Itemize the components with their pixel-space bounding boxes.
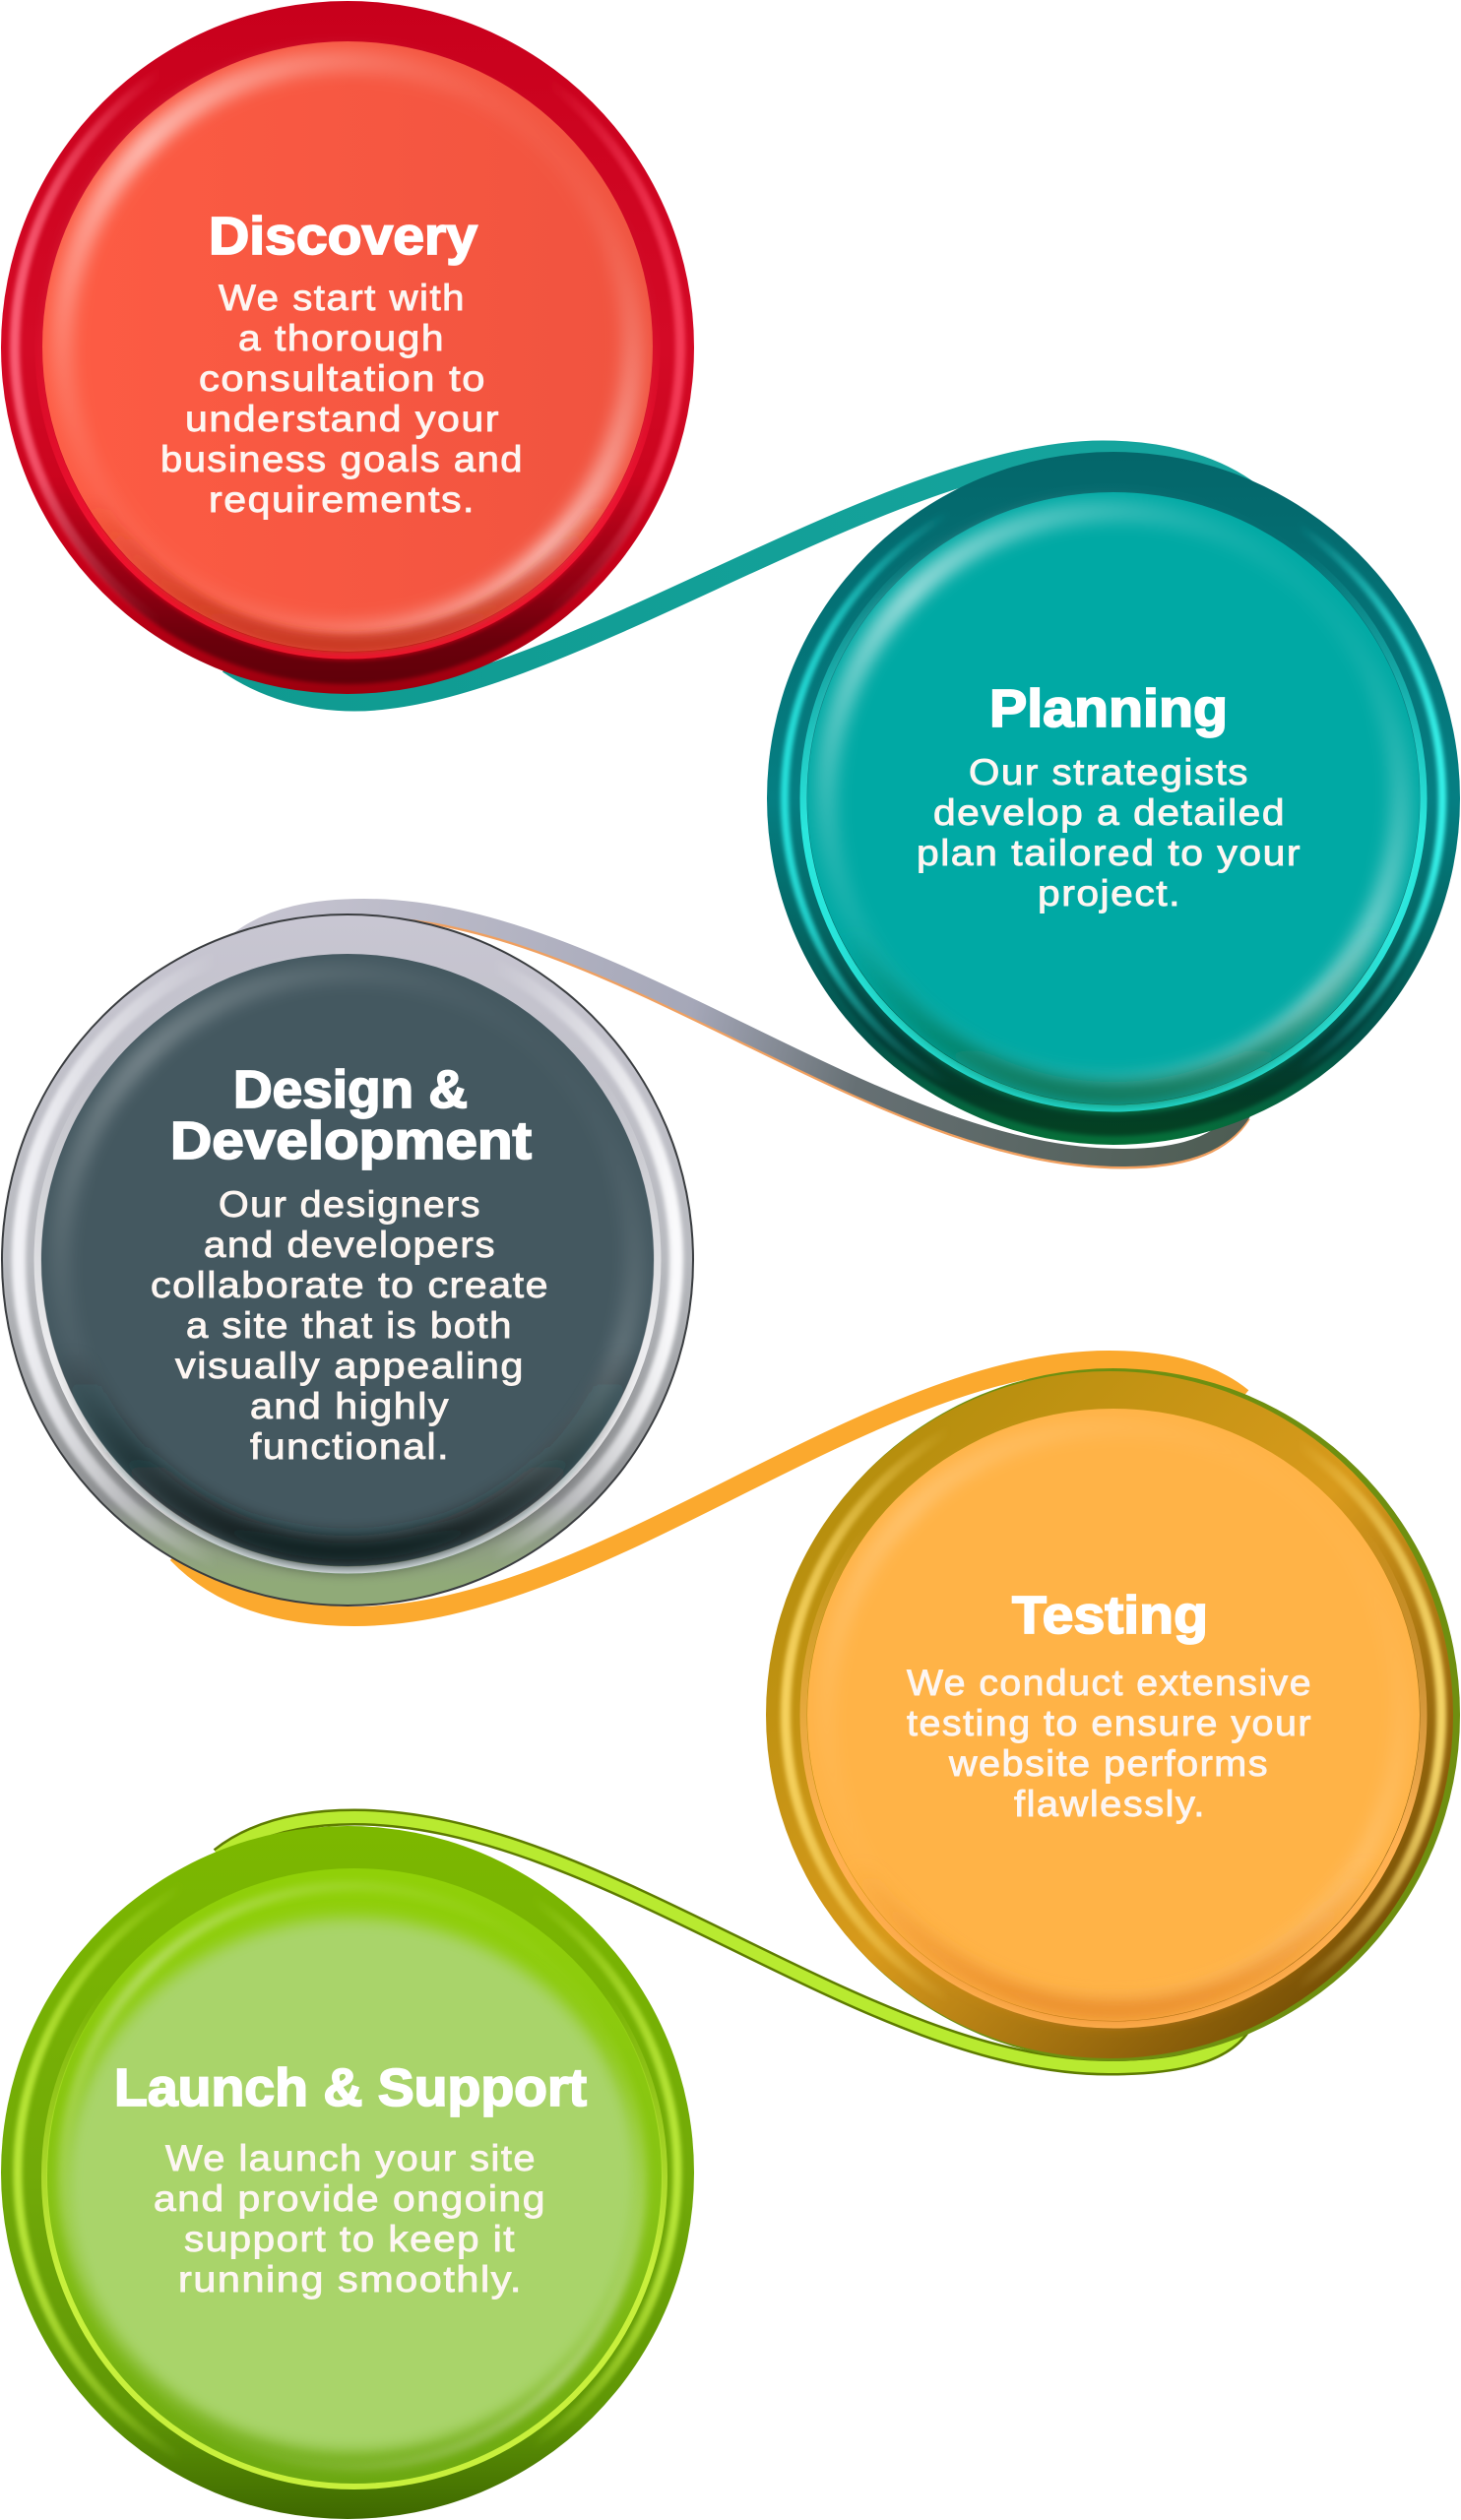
rim: [1, 1, 694, 694]
body text: visually appealing: [175, 1346, 525, 1386]
face: [41, 954, 654, 1566]
panel: testing: [766, 1368, 1460, 2061]
rim: [1, 1826, 694, 2519]
body text: and developers: [204, 1225, 496, 1265]
body text: website performs: [948, 1743, 1269, 1784]
heading: [170, 1060, 532, 1170]
body text: [154, 2138, 546, 2300]
heading: Launch & Support: [114, 2058, 587, 2117]
bright ring: [38, 37, 657, 656]
body text: develop a detailed: [933, 792, 1286, 833]
body text: and provide ongoing: [154, 2178, 546, 2219]
heading: Discovery: [209, 207, 477, 266]
body text: We launch your site: [165, 2138, 537, 2178]
bright ring: [37, 950, 658, 1570]
panel: design and development: [1, 914, 694, 1606]
ribbon: launch to testing bottom: [219, 1817, 1242, 2067]
body text: flawlessly.: [1014, 1784, 1206, 1824]
body text: Our strategists: [969, 752, 1249, 792]
body text: requirements.: [209, 479, 476, 520]
face: [807, 492, 1420, 1104]
body text: plan tailored to your: [917, 833, 1302, 873]
heading: Planning: [989, 679, 1228, 738]
face: [42, 41, 653, 652]
ribbon: discovery to planning: [228, 451, 1250, 701]
body text: understand your: [185, 399, 500, 439]
body text: functional.: [250, 1426, 450, 1467]
body text: Our designers: [219, 1184, 481, 1225]
heading: Testing: [1012, 1586, 1208, 1645]
body text: [151, 1184, 549, 1467]
body text: support to keep it: [184, 2219, 516, 2259]
bright ring: [803, 488, 1424, 1108]
heading: Design &: [233, 1060, 468, 1119]
ribbon: testing to launch: [177, 1360, 1242, 1616]
bright ring: [44, 1866, 665, 2487]
face: [807, 1409, 1420, 2021]
body text: business goals and: [160, 439, 524, 479]
body text: We conduct extensive: [907, 1663, 1312, 1703]
ribbon: design to testing: [239, 908, 1242, 1160]
body text: a site that is both: [186, 1305, 513, 1346]
face: [65, 1918, 640, 2453]
body text: testing to ensure your: [907, 1703, 1312, 1743]
rim: [767, 1368, 1460, 2061]
body text: running smoothly.: [178, 2259, 523, 2300]
rim: [1, 914, 694, 1606]
body text: [917, 752, 1302, 914]
heading: Development: [170, 1111, 532, 1170]
body text: a thorough: [238, 318, 445, 358]
body text: [907, 1663, 1312, 1824]
body text: collaborate to create: [151, 1265, 549, 1305]
bright ring: [803, 1405, 1424, 2025]
body text: [160, 278, 524, 520]
inner band: [46, 1868, 663, 2485]
panel: planning: [767, 452, 1460, 1145]
panel: discovery: [1, 1, 694, 694]
body text: consultation to: [199, 358, 486, 399]
rim: [767, 452, 1460, 1145]
body text: project.: [1038, 873, 1181, 914]
panel: launch and support: [1, 1826, 694, 2519]
body text: and highly: [250, 1386, 450, 1426]
body text: We start with: [219, 278, 466, 318]
